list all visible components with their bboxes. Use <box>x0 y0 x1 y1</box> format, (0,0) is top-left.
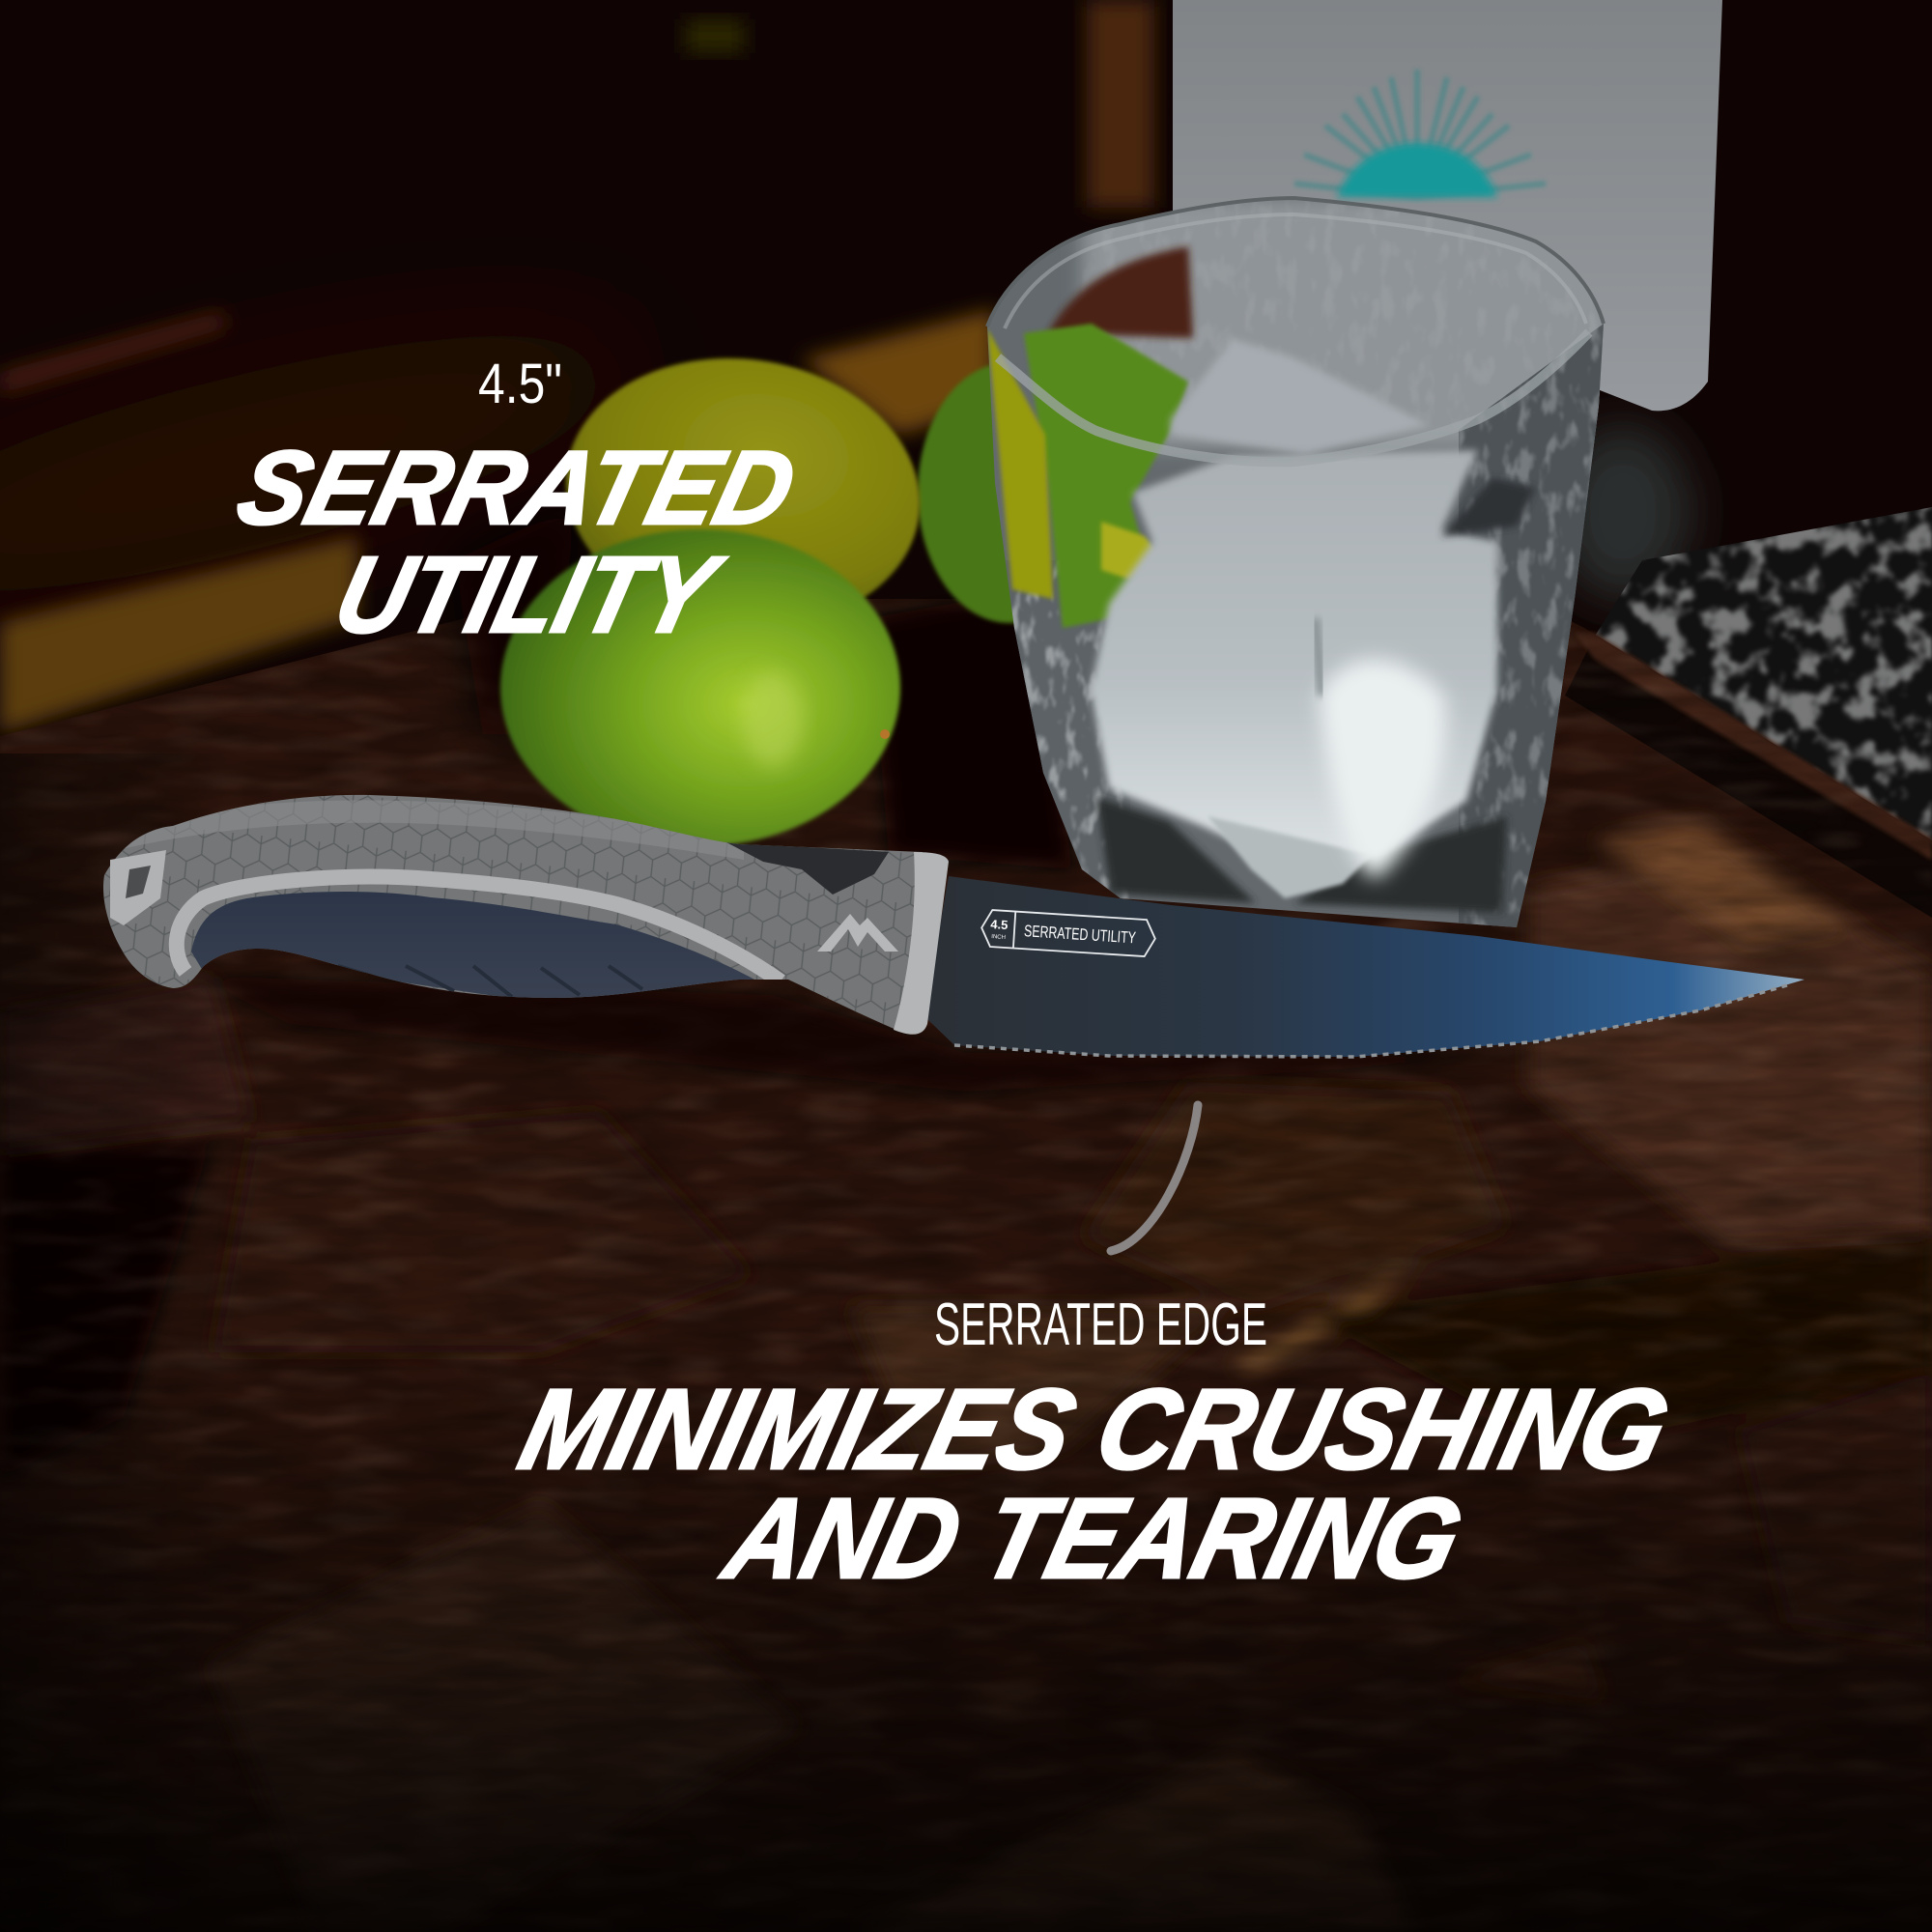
board edge <box>1565 638 1932 918</box>
back lime <box>918 362 1101 623</box>
icon: teal sunburst <box>1294 70 1546 197</box>
blade badge <box>980 909 1156 957</box>
heading: 4.5 inch: 4.5" <box>478 353 562 415</box>
heading: minimizes crushing and tearing <box>509 1367 1680 1603</box>
blade serrations <box>954 985 1787 1057</box>
board surface <box>0 599 1932 1932</box>
glass: dark base <box>1096 797 1507 913</box>
ice: top cube <box>1171 339 1430 454</box>
heading: minimizes crushing and tearing: AND TEARING <box>712 1476 1473 1603</box>
glass: outer rim <box>987 198 1604 327</box>
blade badge: 4.5 <box>990 917 1009 932</box>
glass: back wall reflection <box>1082 198 1613 449</box>
wood grain overlay <box>6 599 1932 1803</box>
bottle label <box>1173 0 1722 411</box>
blade badge: INCH <box>991 934 1006 941</box>
glass: front rim <box>998 332 1589 462</box>
handle grip ribs <box>338 966 642 997</box>
heading: serrated utility: SERRATED <box>227 430 806 547</box>
handle collar <box>894 852 949 1035</box>
subheading: serrated edge: SERRATED EDGE <box>934 1292 1267 1358</box>
knife handle <box>103 794 923 1029</box>
background: granite counter <box>1596 507 1932 840</box>
background: counter strip <box>0 309 995 733</box>
heading: minimizes crushing and tearing: MINIMIZES CRUSHING <box>509 1367 1680 1493</box>
dark shadow near limes and glass <box>869 589 1072 869</box>
heading: serrated utility: UTILITY <box>325 535 733 656</box>
handle lanyard hole <box>110 850 166 925</box>
background: copper object <box>1087 0 1154 208</box>
glass: textured sides <box>1005 560 1130 918</box>
ice: main mass <box>1091 450 1497 869</box>
handle dark wedge <box>726 842 889 895</box>
handle light stripe <box>177 877 781 981</box>
callout line <box>1111 1105 1198 1251</box>
knife blade <box>924 876 1804 1057</box>
knife <box>87 773 1804 1057</box>
green lime <box>500 529 900 846</box>
background: grey bokeh <box>1555 425 1690 599</box>
ice: bright melt <box>1319 659 1446 879</box>
wood blocks <box>0 821 1932 1932</box>
heading: serrated utility <box>227 430 806 656</box>
knife shadow <box>193 976 1642 1092</box>
blade badge: SERRATED UTILITY <box>1023 922 1136 947</box>
glass of ice <box>966 193 1623 947</box>
bottom vignette <box>0 1352 1932 1932</box>
handle navy grip <box>191 892 773 1005</box>
icon: mountain logo <box>817 914 898 952</box>
glass: lime seen through <box>1024 324 1188 628</box>
background: upper counter glow <box>0 281 656 646</box>
yellow lime <box>549 336 937 649</box>
ice: lower crystals <box>1208 816 1372 898</box>
